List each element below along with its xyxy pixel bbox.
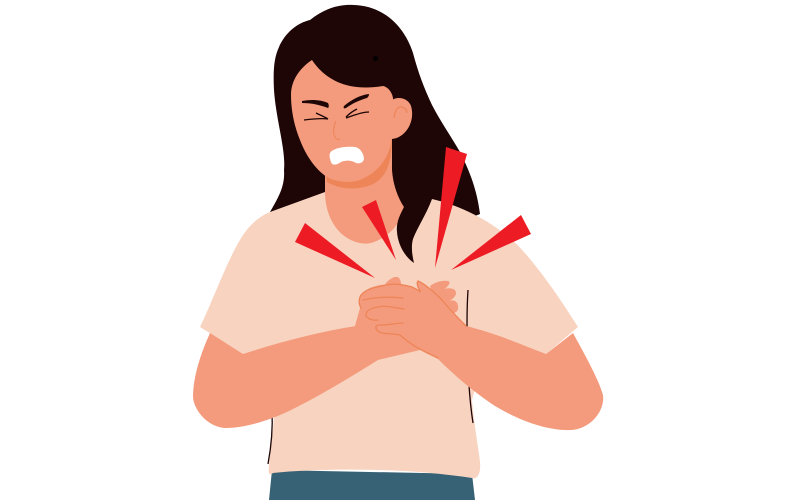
head skin [291, 60, 393, 182]
spike tall center [435, 147, 467, 268]
body line left [268, 410, 272, 464]
chin shadow [325, 135, 392, 189]
back fingers right [430, 281, 458, 320]
face [291, 56, 412, 182]
left arm [193, 300, 413, 428]
right closed eye [346, 109, 369, 118]
body line right [467, 290, 473, 423]
inner ear line [394, 107, 407, 118]
hair strand over shirt [392, 120, 440, 263]
hair fringe spot [373, 56, 378, 61]
left hand [355, 300, 420, 360]
spike far left [295, 223, 375, 278]
ear [391, 98, 412, 139]
left closed eye [304, 113, 328, 120]
neck [325, 140, 404, 244]
ear shape [391, 98, 412, 139]
pain spikes [295, 147, 531, 278]
hair back [270, 5, 480, 240]
left eyebrow [302, 100, 329, 108]
right eyebrow [344, 94, 369, 108]
mouth [330, 147, 364, 165]
pants [269, 470, 475, 500]
back fingers left [385, 277, 401, 290]
nose [334, 121, 340, 139]
spike near neck [362, 200, 396, 260]
spike right [451, 215, 531, 270]
hand outline and finger lines [359, 281, 466, 358]
shirt [200, 192, 578, 478]
hands clasped [355, 277, 603, 430]
right arm and top hand [359, 281, 603, 430]
